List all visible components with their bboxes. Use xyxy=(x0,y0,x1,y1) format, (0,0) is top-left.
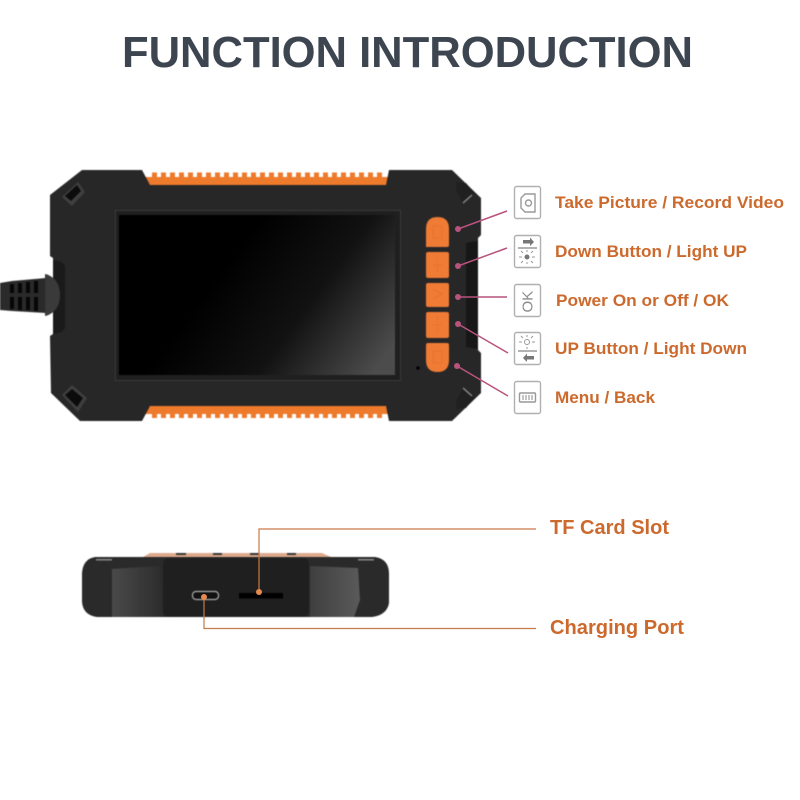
left grip xyxy=(112,566,163,617)
device front view xyxy=(0,170,481,421)
orange buttons xyxy=(426,217,449,372)
label: charging port: Charging Port xyxy=(550,617,684,639)
button labels: Menu / Back xyxy=(555,388,656,407)
pointer lines xyxy=(454,211,508,396)
corner highlights xyxy=(96,559,374,560)
icon: up button and light down xyxy=(514,332,540,364)
icon: menu xyxy=(514,382,540,414)
button labels: Power On or Off / OK xyxy=(556,291,730,310)
orange top strip xyxy=(143,172,389,185)
label: TF card slot: TF Card Slot xyxy=(550,517,669,539)
microphone hole xyxy=(416,366,420,370)
right grip xyxy=(310,566,360,617)
orange bottom strip xyxy=(143,406,389,418)
icon: camera xyxy=(514,186,540,218)
corner clips xyxy=(62,182,474,412)
title: FUNCTION INTRODUCTION xyxy=(122,29,693,77)
icon: down button and light up xyxy=(514,236,540,268)
icon: OK xyxy=(514,284,540,316)
left recess xyxy=(53,260,65,334)
button edge marks xyxy=(176,553,296,555)
TF card slot pointer xyxy=(256,529,536,595)
screen xyxy=(119,215,395,375)
right recess xyxy=(466,241,478,349)
side body xyxy=(82,557,389,617)
button labels: Down Button / Light UP xyxy=(555,242,747,261)
cable xyxy=(0,274,61,316)
device side view xyxy=(82,553,389,617)
button labels xyxy=(555,193,784,407)
icon: OK: OK xyxy=(520,291,536,312)
button labels: UP Button / Light Down xyxy=(555,339,747,358)
TF card slot xyxy=(239,593,283,598)
button embossed marks xyxy=(433,226,442,363)
device body xyxy=(50,170,481,421)
orange buttons edge xyxy=(143,553,331,557)
centre panel xyxy=(163,558,309,617)
collar over recess xyxy=(46,274,60,316)
charging port pointer xyxy=(201,594,536,628)
screen frame xyxy=(116,210,400,380)
button labels: Take Picture / Record Video xyxy=(555,193,784,212)
micro USB port xyxy=(192,592,218,600)
